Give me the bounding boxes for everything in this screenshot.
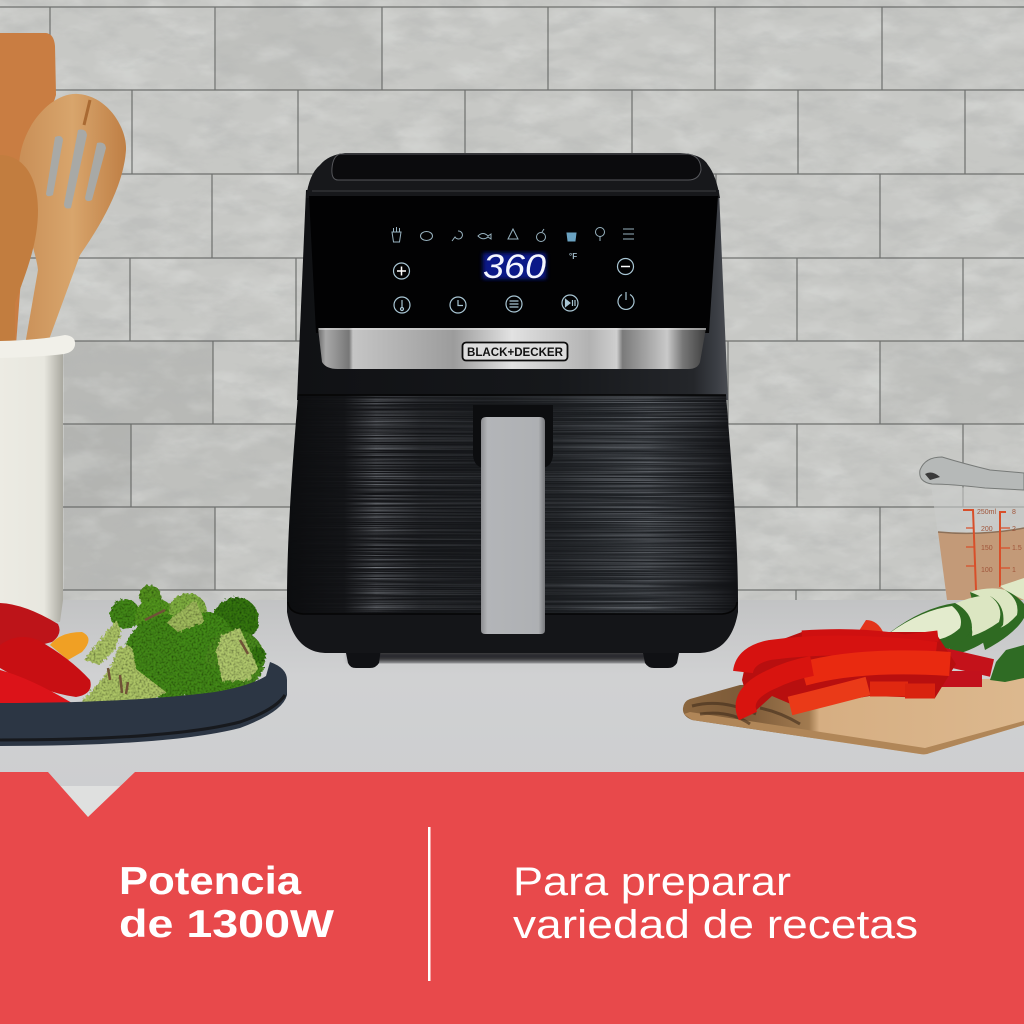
broccoli bbox=[80, 585, 266, 704]
control buttons bbox=[394, 258, 634, 313]
basket handle recess bbox=[473, 405, 553, 468]
air fryer feet bbox=[345, 648, 680, 668]
liquid bbox=[938, 528, 1024, 600]
air fryer base bbox=[287, 598, 738, 653]
air fryer basket bbox=[285, 395, 740, 617]
logo badge bbox=[462, 342, 568, 360]
display: 360: 360 bbox=[483, 248, 546, 286]
utensil crock bbox=[0, 335, 75, 622]
background: marble counter bbox=[0, 600, 1024, 826]
shadow under air fryer bbox=[350, 650, 672, 662]
divider bbox=[428, 827, 430, 981]
red pepper strips bbox=[742, 620, 992, 716]
wooden utensils bbox=[0, 33, 126, 345]
cup markings: 1.5 bbox=[1012, 545, 1022, 552]
unit: °F bbox=[569, 252, 577, 261]
control panel bbox=[309, 196, 718, 333]
banner heading: de 1300W bbox=[119, 903, 334, 946]
mini peppers bbox=[0, 603, 91, 703]
cup markings: 8 bbox=[1012, 509, 1016, 516]
measuring cup bbox=[920, 457, 1024, 600]
cup markings: 150 bbox=[981, 545, 993, 552]
cup rim bbox=[920, 457, 1024, 490]
utensil: slotted spoon bbox=[19, 94, 126, 345]
banner description: variedad de recetas bbox=[513, 903, 918, 947]
cup markings: 100 bbox=[981, 567, 993, 574]
banner description: Para preparar bbox=[513, 860, 791, 904]
lid bbox=[306, 153, 720, 198]
food preset icons bbox=[392, 227, 634, 242]
plate of vegetables bbox=[0, 585, 287, 746]
background: brick wall bbox=[0, 0, 1024, 602]
cup markings: 200 bbox=[981, 526, 993, 533]
plate dish bbox=[0, 662, 287, 746]
utensil: flat spatula bbox=[0, 33, 56, 345]
cup markings bbox=[963, 509, 1022, 590]
parsley bbox=[990, 645, 1024, 682]
cucumber slices bbox=[884, 578, 1024, 682]
cup markings: 250ml bbox=[977, 509, 997, 516]
red banner bbox=[0, 772, 1024, 1024]
air fryer upper body bbox=[297, 190, 728, 400]
utensil: round spoon bbox=[0, 155, 38, 345]
chrome band bbox=[318, 328, 706, 369]
air fryer bbox=[285, 153, 740, 668]
cutting board bbox=[683, 678, 1024, 754]
banner heading bbox=[119, 860, 334, 946]
cup markings: 1 bbox=[1012, 567, 1016, 574]
banner description bbox=[513, 860, 918, 947]
cup markings: 2 bbox=[1012, 526, 1016, 533]
banner heading: Potencia bbox=[119, 860, 301, 903]
logo badge: BLACK+DECKER bbox=[467, 347, 564, 359]
basket handle bbox=[481, 417, 545, 634]
